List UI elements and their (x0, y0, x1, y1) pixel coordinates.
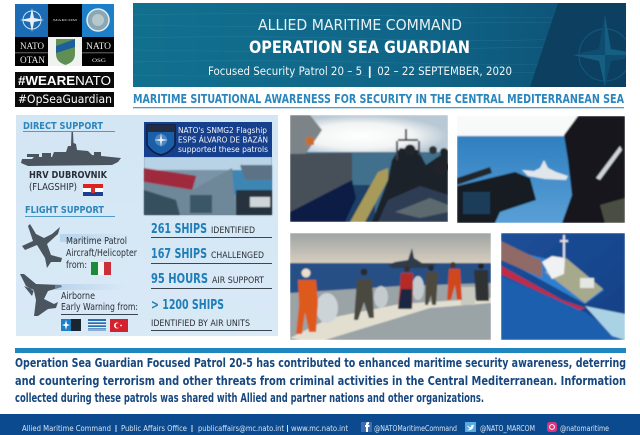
text: airborne early warning: Early Warning from: (61, 302, 138, 313)
photo: crew on deck with warship (290, 233, 491, 340)
stat: ships identified: IDENTIFIED (211, 226, 255, 236)
photo: view of ship from helicopter (457, 116, 625, 223)
text: maritime patrol: Maritime Patrol (66, 236, 127, 247)
stat: identified by air units (151, 297, 272, 331)
icon: Italian flag (91, 262, 111, 275)
summary paragraph (15, 355, 626, 405)
ship name: HRV DUBROVNIK (29, 170, 108, 181)
hashtag: OpSeaGuardian: #OpSeaGuardian (18, 92, 112, 106)
stat: ships identified (151, 221, 272, 238)
footer contact details: Public Affairs Office (121, 424, 187, 433)
stat: air support hours (151, 271, 272, 289)
header banner (133, 3, 640, 87)
photo: SNMG2 flagship with caption (144, 122, 272, 215)
photo: cargo ship from above (501, 233, 625, 340)
footer bar (0, 414, 640, 435)
footer contact details: www.mc.nato.int (291, 424, 348, 433)
logo block: NATO MARCOM: NATO (20, 41, 44, 51)
panel: support and statistics (16, 115, 278, 336)
icon: AWACS aircraft (20, 274, 62, 316)
stat: identified by air units: IDENTIFIED BY AIR UNITS (151, 319, 250, 329)
stat: ships challenged: 167 SHIPS (151, 246, 207, 262)
icon: NATO flag (61, 319, 81, 331)
icon: Croatian flag (83, 184, 103, 196)
footer contact details: publicaffairs@mc.nato.int (198, 424, 284, 433)
twitter handle: @NATO_MARCOM (480, 424, 535, 433)
stat: ships identified: 261 SHIPS (151, 221, 207, 237)
text: maritime patrol: from: (66, 260, 87, 271)
header line 1: ALLIED MARITIME COMMAND (258, 16, 462, 34)
text: airborne early warning: Airborne (61, 291, 95, 302)
footer contact details (22, 424, 348, 433)
photo: boarding team in boat (290, 115, 449, 222)
logo block: NATO MARCOM: OSG (92, 58, 106, 64)
icon: Greek flag (88, 319, 106, 331)
text: maritime patrol: Aircraft/Helicopter (66, 248, 137, 259)
logo block: NATO MARCOM: MARCOM (53, 18, 78, 22)
icon: ship silhouette (21, 132, 121, 166)
stat: ships challenged (151, 246, 272, 264)
stat: air support hours: 95 HOURS (151, 271, 208, 287)
icon: twitter (465, 422, 476, 432)
heading: direct support: DIRECT SUPPORT (23, 121, 103, 132)
ship role: (FLAGSHIP) (29, 182, 77, 193)
header line 3: dates: Focused Security Patrol 20 – 5 ❙ 02 – 22 SEPTEMBER, 2020 (208, 64, 512, 78)
hashtag: WEARENATO: #WEARENATO (18, 73, 111, 88)
icon: maritime patrol aircraft (22, 224, 62, 268)
icon: instagram (547, 422, 557, 432)
stat: air support hours: AIR SUPPORT (212, 276, 265, 286)
instagram handle: @natomaritime (560, 424, 609, 433)
photo: SNMG2 flagship with caption: NATO's SNMG2 Flagship (178, 126, 267, 135)
facebook handle: @NATOMaritimeCommand (374, 424, 457, 433)
icon: Turkish flag (110, 319, 128, 332)
text: airborne early warning (55, 284, 138, 315)
logo block: NATO MARCOM (15, 4, 114, 66)
rule above summary (15, 348, 626, 353)
footer contact details: Allied Maritime Command (22, 424, 111, 433)
logo block: NATO MARCOM: OTAN (20, 55, 46, 65)
stat: ships challenged: CHALLENGED (211, 251, 264, 261)
heading: flight support: FLIGHT SUPPORT (25, 205, 104, 216)
photo: SNMG2 flagship with caption: supported these patrols (178, 145, 268, 154)
photo: SNMG2 flagship with caption: ESPS ÁLVARO DE BAZÁN (178, 134, 268, 144)
logo block: NATO MARCOM: NATO (86, 41, 112, 51)
text: maritime patrol (60, 234, 137, 271)
stat: identified by air units: > 1200 SHIPS (151, 297, 224, 313)
icon: facebook (361, 422, 372, 432)
header line 2: operation title: OPERATION SEA GUARDIAN (249, 38, 470, 57)
